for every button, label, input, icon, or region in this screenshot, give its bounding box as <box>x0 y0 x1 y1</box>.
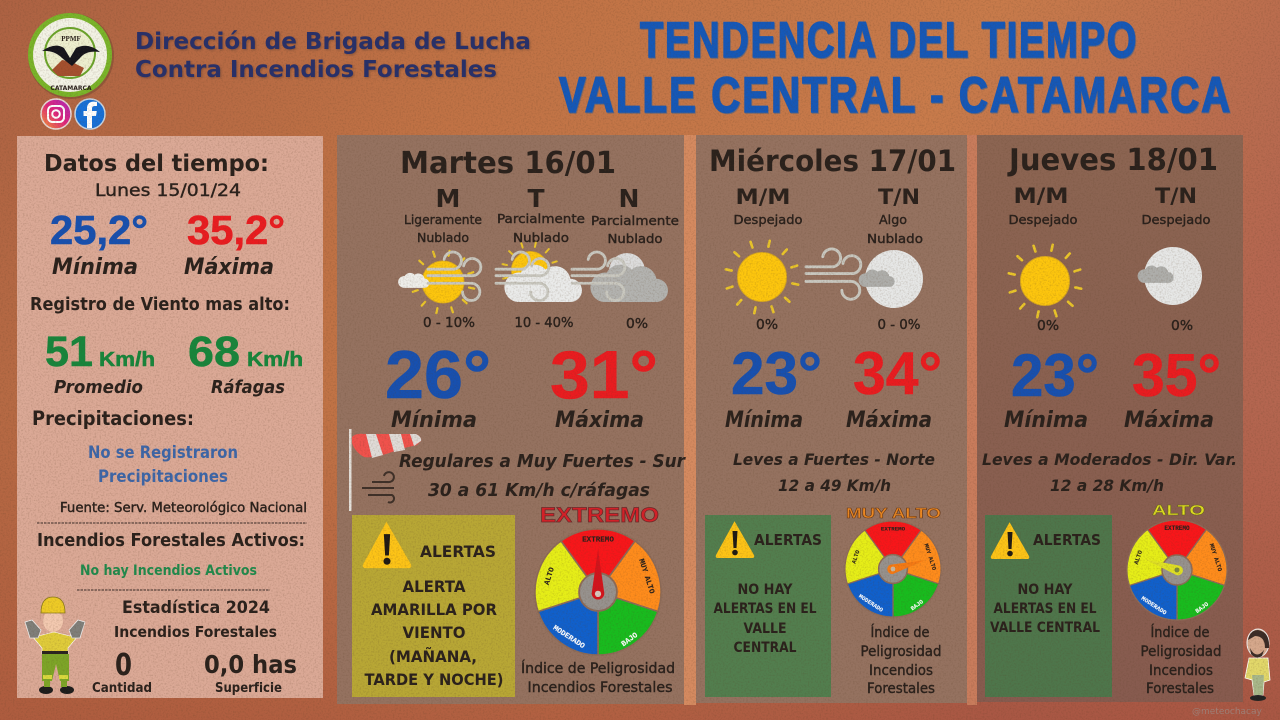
statistics: Cantidad <box>92 680 152 696</box>
header: institution name <box>135 27 531 83</box>
sky description: Despejado <box>1142 212 1210 227</box>
wind forecast: 12 a 49 Km/h <box>778 476 891 495</box>
gauge caption: Forestales <box>867 681 935 697</box>
alert text: AMARILLA POR <box>371 600 497 619</box>
wind gusts <box>188 328 303 398</box>
danger level label: alto: ALTO <box>1152 502 1205 519</box>
wind average: Promedio <box>54 377 143 398</box>
sky description: mañana <box>404 212 482 245</box>
minimum temperature: 23° <box>731 340 822 407</box>
maximum temperature <box>1124 342 1221 433</box>
wind forecast: Regulares a Muy Fuertes - Sur <box>399 451 686 472</box>
alert text: VIENTO <box>402 623 466 642</box>
heading: incendios activos: Incendios Forestales Activos: <box>37 530 305 551</box>
precipitation probabilities: 10 - 40% <box>514 315 574 331</box>
sky description: noche <box>591 213 679 246</box>
minimum temperature: 23° <box>1011 342 1099 409</box>
wind forecast <box>733 450 935 495</box>
gauge caption: Forestales <box>1146 681 1214 697</box>
icon: forecaster caricature <box>1245 629 1270 701</box>
gauge: fire danger extremo: ALTO <box>544 566 557 586</box>
logo: brigade badge: CATAMARCA <box>50 85 92 92</box>
statistics: 0,0 has <box>204 650 297 679</box>
heading: datos del tiempo: Datos del tiempo: <box>44 151 269 177</box>
precipitation probabilities <box>756 317 921 333</box>
gauge caption: Incendios <box>1149 663 1213 679</box>
maximum temperature <box>184 207 285 280</box>
statistics: 0 <box>115 648 132 683</box>
alert box: amarilla <box>352 515 515 697</box>
gauge caption: Incendios Forestales <box>528 680 672 696</box>
sky description: mañana: Ligeramente <box>404 212 482 227</box>
alert box: no alerts <box>985 515 1112 697</box>
date: Lunes 15/01/24 <box>95 181 241 201</box>
panel: martes <box>337 135 686 704</box>
statistics: Estadística 2024 <box>122 598 270 618</box>
column labels: T/N <box>878 185 920 209</box>
column labels <box>736 185 920 209</box>
gauge caption: Peligrosidad <box>1140 644 1222 660</box>
gauge: fire danger muy alto: MODERADO <box>857 593 885 614</box>
alert text: VALLE CENTRAL <box>990 620 1100 636</box>
icon: wind <box>806 249 861 299</box>
alert text: ALERTAS EN EL <box>994 601 1097 617</box>
heading: viento: Registro de Viento mas alto: <box>30 295 290 315</box>
gauge: fire danger alto: EXTREMO <box>1164 525 1190 532</box>
maximum temperature: Máxima <box>555 408 644 433</box>
gauge: fire danger alto: MODERADO <box>1140 595 1168 617</box>
statistics: Incendios Forestales <box>114 623 277 641</box>
gauge: fire danger muy alto: MUY ALTO <box>922 543 938 572</box>
wind forecast <box>399 451 686 501</box>
danger level label: extremo: EXTREMO <box>540 504 659 527</box>
alert heading: ALERTAS <box>754 531 822 549</box>
gauge: fire danger alto: ALTO <box>1133 549 1144 565</box>
gauge: fire danger extremo: EXTREMO <box>582 537 614 545</box>
precipitation probabilities: 0 - 10% <box>423 315 475 331</box>
wind average: 51 <box>45 328 93 376</box>
sky description: Algo <box>879 212 907 227</box>
precipitation probabilities: 0% <box>756 317 778 333</box>
alert text <box>714 582 817 656</box>
minimum temperature: Mínima <box>1004 408 1088 433</box>
precipitation probabilities: 0 - 0% <box>878 317 921 333</box>
icon: sun with cloud and wind <box>398 237 488 327</box>
sky description <box>1008 212 1210 227</box>
danger level label: muy alto: MUY ALTO <box>846 505 941 522</box>
header: institution name: Contra Incendios Forestales <box>135 55 497 83</box>
wind forecast <box>982 450 1237 495</box>
gauge: fire danger alto: MUY ALTO <box>1208 543 1223 573</box>
maximum temperature: 34° <box>853 340 942 407</box>
wind average <box>45 328 155 398</box>
gauge caption: Índice de Peligrosidad <box>521 660 675 677</box>
icon: moon with cloud <box>1138 247 1202 305</box>
alert box: no alerts <box>705 515 831 697</box>
icon: firefighter mascot <box>25 597 85 694</box>
column labels: T/N <box>1155 184 1197 208</box>
column labels: M <box>436 184 460 213</box>
column labels <box>1014 184 1197 208</box>
sky description: noche: Parcialmente <box>591 213 679 228</box>
wind gusts: Ráfagas <box>211 377 285 398</box>
gauge caption <box>1140 624 1222 697</box>
minimum temperature: Mínima <box>52 255 138 280</box>
gauge: fire danger muy alto <box>845 521 941 617</box>
sky description: noche: Nublado <box>608 231 662 246</box>
alert text <box>990 582 1100 636</box>
panel: datos del tiempo <box>17 136 323 698</box>
gauge: fire danger muy alto: BAJO <box>909 598 925 612</box>
sky description: mañana: Nublado <box>417 230 469 245</box>
minimum temperature: Mínima <box>391 408 477 433</box>
icon: facebook <box>75 99 105 129</box>
icon: instagram <box>41 99 71 129</box>
gauge: fire danger muy alto: EXTREMO <box>881 526 906 533</box>
icon: sun <box>993 229 1097 333</box>
sky description <box>734 212 923 246</box>
icon: warning triangle <box>991 522 1029 559</box>
gauge: fire danger alto: BAJO <box>1194 600 1210 615</box>
precipitation probabilities: 0% <box>1171 318 1193 334</box>
maximum temperature: 31° <box>550 337 658 413</box>
column labels <box>436 184 639 213</box>
maximum temperature: Máxima <box>1124 408 1214 433</box>
precipitation probabilities: 0% <box>626 316 648 332</box>
precipitation probabilities <box>1037 318 1193 334</box>
precipitation probabilities <box>423 315 648 332</box>
heading: precipitaciones: Precipitaciones: <box>32 407 194 430</box>
sky description: tarde <box>497 211 585 245</box>
alert text: (MAÑANA, <box>389 647 477 666</box>
column labels: N <box>619 184 639 213</box>
gauge: fire danger extremo <box>535 529 661 655</box>
minimum temperature <box>1004 342 1099 433</box>
maximum temperature: Máxima <box>184 255 274 280</box>
minimum temperature: Mínima <box>725 408 803 433</box>
icon: small wind <box>362 472 394 503</box>
column labels: T <box>527 184 545 213</box>
title <box>559 13 1230 123</box>
statistics: Superficie <box>215 680 282 696</box>
icon: windsock <box>349 429 421 511</box>
gauge caption <box>860 624 942 697</box>
icon: warning triangle <box>716 521 754 558</box>
precipitation note: Precipitaciones <box>98 467 228 487</box>
alert text: TARDE Y NOCHE) <box>364 670 504 689</box>
title: VALLE CENTRAL - CATAMARCA <box>559 67 1230 123</box>
logo: brigade badge <box>28 13 114 99</box>
sky description: tarde: Nublado <box>513 230 569 245</box>
alert text: CENTRAL <box>734 640 797 656</box>
minimum temperature: 25,2° <box>50 207 148 253</box>
minimum temperature <box>725 340 822 433</box>
gauge caption: Peligrosidad <box>860 644 942 660</box>
wind gusts: 68 <box>188 328 240 376</box>
alert text: NO HAY <box>1018 582 1073 598</box>
panel: jueves <box>977 135 1243 702</box>
wind forecast: 30 a 61 Km/h c/ráfagas <box>428 480 650 501</box>
wind forecast: 12 a 28 Km/h <box>1050 476 1164 495</box>
minimum temperature <box>50 207 148 280</box>
heading: martes: Martes 16/01 <box>400 146 616 181</box>
icon: moon with cloud <box>859 250 923 308</box>
credit: @meteochacay <box>1192 707 1263 717</box>
icon: sun <box>710 225 814 329</box>
precipitation note: No se Registraron <box>88 443 238 463</box>
wind gusts: Km/h <box>247 349 303 371</box>
alert text: VALLE <box>744 621 786 637</box>
active fires note: No hay Incendios Activos <box>80 563 257 579</box>
gauge caption: Índice de <box>870 624 930 641</box>
precipitation note <box>88 443 238 487</box>
gauge caption: Índice de <box>1150 624 1210 641</box>
icon: warning triangle <box>363 522 411 568</box>
precipitation probabilities: 0% <box>1037 318 1059 334</box>
gauge caption: Incendios <box>869 663 933 679</box>
alert heading: ALERTAS <box>1033 531 1101 549</box>
gauge: fire danger extremo: BAJO <box>620 631 640 649</box>
maximum temperature <box>846 340 942 433</box>
gauge: fire danger muy alto: ALTO <box>851 549 862 565</box>
wind forecast: Leves a Moderados - Dir. Var. <box>982 450 1237 469</box>
icon: partly cloudy with wind <box>490 230 582 310</box>
gauge caption <box>521 660 675 696</box>
column labels: M/M <box>736 185 790 209</box>
sky description: Despejado <box>734 212 802 227</box>
icon: night cloud with wind <box>572 252 668 302</box>
wind average: Km/h <box>99 349 155 371</box>
alert text: ALERTA <box>402 577 466 596</box>
panel: miércoles <box>696 135 967 703</box>
sky description: tarde: Parcialmente <box>497 211 585 226</box>
maximum temperature: Máxima <box>846 408 932 433</box>
heading: miércoles: Miércoles 17/01 <box>709 144 956 178</box>
alert text: ALERTAS EN EL <box>714 601 817 617</box>
gauge: fire danger extremo: MUY ALTO <box>636 558 655 595</box>
statistics <box>92 598 297 696</box>
minimum temperature: 26° <box>385 337 491 413</box>
column labels: M/M <box>1014 184 1068 208</box>
maximum temperature: 35° <box>1132 342 1221 409</box>
alert heading: ALERTAS <box>420 542 496 561</box>
gauge: fire danger extremo: MODERADO <box>551 625 586 651</box>
source: Fuente: Serv. Meteorológico Nacional <box>60 501 307 516</box>
sky description: Despejado <box>1008 212 1078 227</box>
heading: jueves: Jueves 18/01 <box>1007 143 1218 178</box>
header: institution name: Dirección de Brigada de Lucha <box>135 27 531 55</box>
alert text: NO HAY <box>738 582 793 598</box>
wind forecast: Leves a Fuertes - Norte <box>733 450 935 469</box>
maximum temperature: 35,2° <box>187 207 285 253</box>
logo: brigade badge: PPMF <box>61 35 81 43</box>
alert text <box>364 577 504 689</box>
title: TENDENCIA DEL TIEMPO <box>640 13 1136 68</box>
sky description: Nublado <box>867 231 923 246</box>
gauge: fire danger alto <box>1127 520 1227 620</box>
